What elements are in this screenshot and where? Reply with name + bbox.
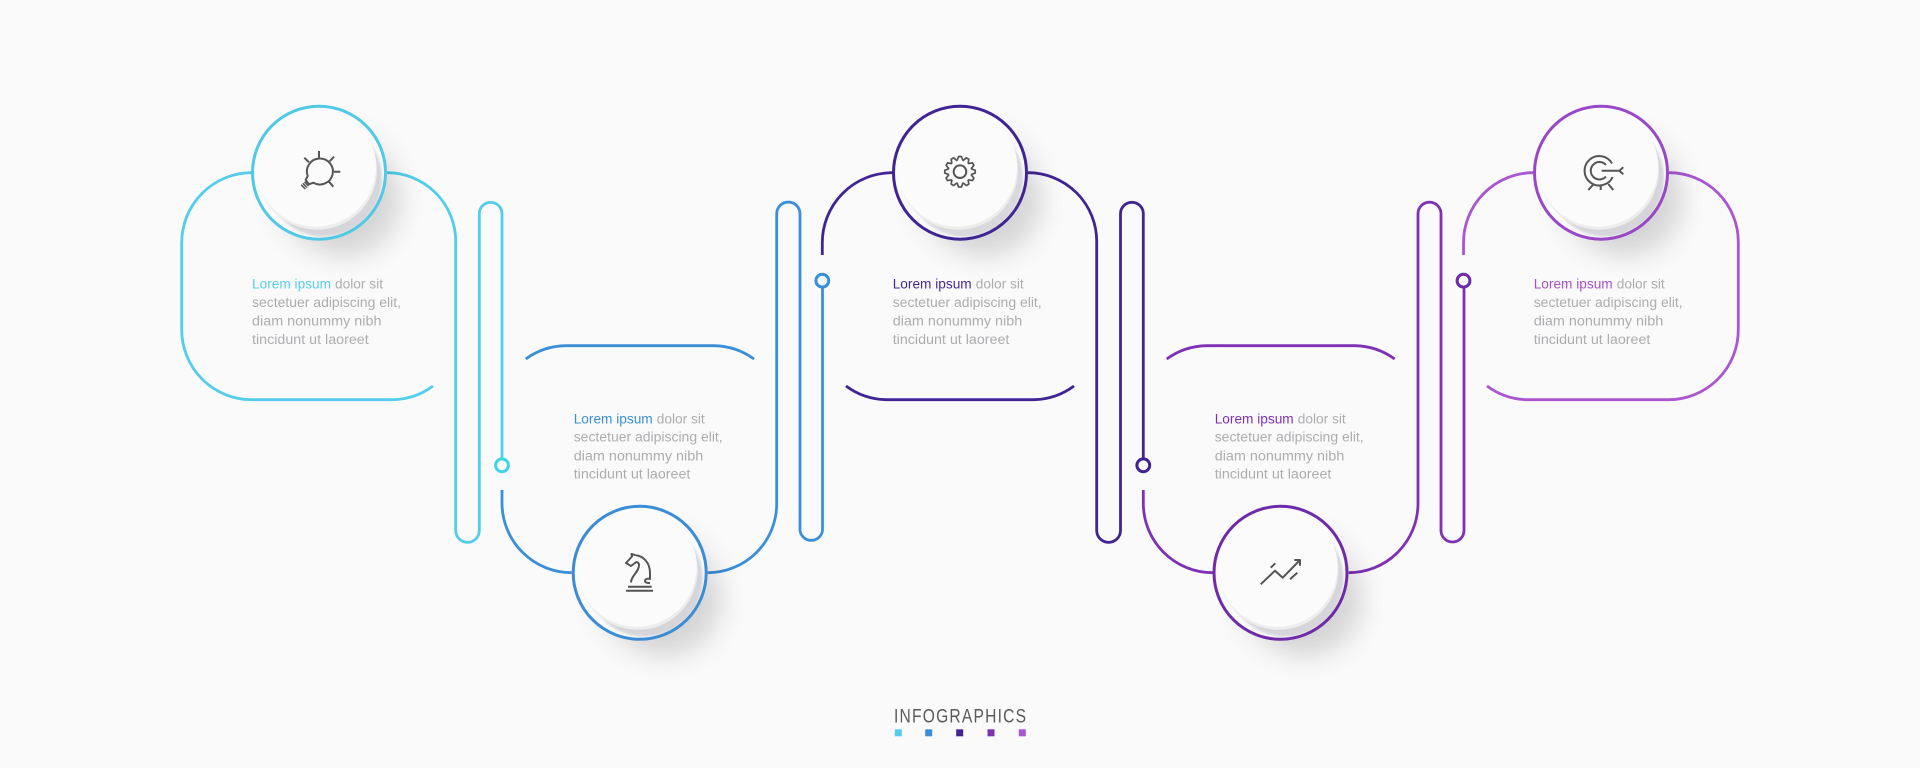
icon: chess knight <box>626 554 653 591</box>
step 5 badge with target icon <box>1534 106 1685 259</box>
icon: gear <box>945 156 975 187</box>
connector dot 2 <box>816 274 829 287</box>
text block 5 <box>1534 277 1683 347</box>
text block 4: Lorem ipsum <box>1215 411 1294 426</box>
step 1 badge with bulb icon <box>252 106 403 259</box>
panel 1 outline: cyan <box>182 173 502 542</box>
panel 5 outline: orchid <box>1464 173 1738 400</box>
text block 1: diam nonummy nibh <box>252 314 382 329</box>
text block 1: tincidunt ut laoreet <box>252 332 369 347</box>
step 4 badge with trend icon <box>1214 506 1364 659</box>
panel 4 outline: purple <box>1143 202 1464 573</box>
text block 5: tincidunt ut laoreet <box>1534 332 1651 347</box>
title: INFOGRAPHICS <box>894 705 1026 727</box>
text block 4: diam nonummy nibh <box>1215 448 1344 463</box>
text block 3: sectetuer adipiscing elit, <box>893 295 1042 310</box>
text block 3: tincidunt ut laoreet <box>893 332 1010 347</box>
text block 5: diam nonummy nibh <box>1534 314 1663 329</box>
icon: target with arrow <box>1585 156 1623 190</box>
icon: growth arrow <box>1261 560 1300 584</box>
panel 2 outline: blue <box>502 202 822 573</box>
panel 3 outline: indigo <box>822 173 1143 542</box>
text block 4: dolor sit <box>1298 411 1346 426</box>
text block 5: Lorem ipsum <box>1534 277 1613 292</box>
legend squares <box>895 729 1026 736</box>
step 3 badge with gear icon <box>894 106 1044 259</box>
text block 2 <box>574 411 723 482</box>
text block 2: Lorem ipsum <box>574 411 653 426</box>
text block 3: dolor sit <box>976 277 1024 292</box>
icon: light bulb <box>301 151 340 189</box>
text block 4: sectetuer adipiscing elit, <box>1215 430 1364 445</box>
text block 2: tincidunt ut laoreet <box>574 467 691 482</box>
text block 1 <box>252 277 401 347</box>
text block 1: sectetuer adipiscing elit, <box>252 295 401 310</box>
text block 3: diam nonummy nibh <box>893 314 1022 329</box>
connector dot 1 <box>496 459 508 472</box>
text block 5: dolor sit <box>1617 277 1665 292</box>
text block 3: Lorem ipsum <box>893 277 972 292</box>
text block 3 <box>893 277 1042 347</box>
text block 2: sectetuer adipiscing elit, <box>574 430 723 445</box>
text block 1: dolor sit <box>335 277 383 292</box>
text block 1: Lorem ipsum <box>252 277 331 292</box>
text block 4 <box>1215 411 1364 482</box>
step 2 badge with knight icon <box>573 506 724 659</box>
text block 4: tincidunt ut laoreet <box>1215 467 1332 482</box>
connector dot 3 <box>1137 459 1150 472</box>
connector dot 4 <box>1457 274 1470 287</box>
text block 2: dolor sit <box>657 411 705 426</box>
text block 2: diam nonummy nibh <box>574 448 703 463</box>
text block 5: sectetuer adipiscing elit, <box>1534 295 1683 310</box>
